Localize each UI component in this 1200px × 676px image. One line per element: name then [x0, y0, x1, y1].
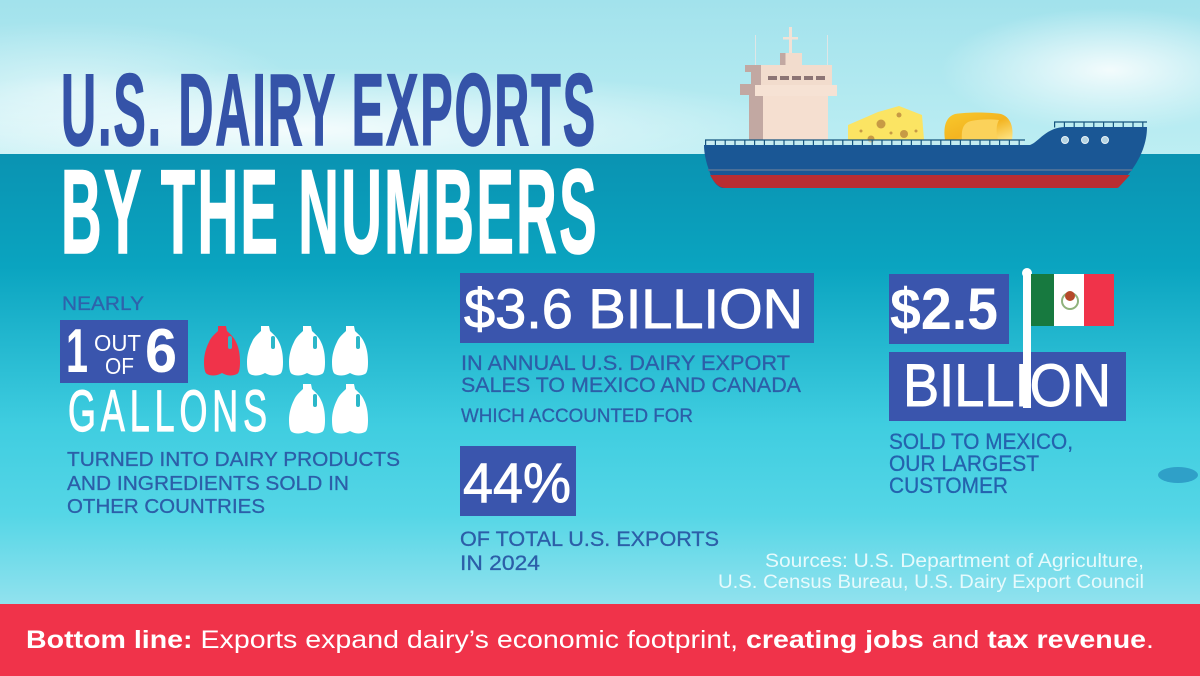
description: SOLD TO MEXICO, [889, 429, 1073, 454]
description: TURNED INTO DAIRY PRODUCTS [67, 448, 400, 471]
callout: 1 out of 6: 6 [145, 317, 177, 386]
sky background [0, 0, 1200, 192]
sources: Sources: U.S. Department of Agriculture, [765, 551, 1144, 572]
description: WHICH ACCOUNTED FOR [461, 405, 693, 427]
icon: cheese wedge [848, 106, 924, 142]
description: OTHER COUNTRIES [67, 495, 265, 518]
icon: milk jugs row two [289, 384, 368, 434]
bottom line banner: Bottom line: Exports expand dairy’s economic footprint, creating jobs and tax revenue . [26, 626, 1154, 654]
description: IN 2024 [460, 552, 540, 575]
title [61, 53, 599, 279]
description: SALES TO MEXICO AND CANADA [461, 374, 801, 397]
description [889, 429, 1073, 498]
ship railings [705, 122, 1147, 142]
description [460, 528, 719, 575]
description [67, 448, 400, 518]
callout: 1 out of 6 [60, 317, 188, 386]
panel: Mexico 2.5 billion [889, 268, 1126, 498]
callout: 44%: 44% [463, 451, 571, 514]
description: IN ANNUAL U.S. DAIRY EXPORT [461, 352, 790, 375]
callout: $3.6 billion: $3.6 BILLION [464, 277, 803, 340]
description: AND INGREDIENTS SOLD IN [67, 472, 349, 495]
callout: $2.5: $2.5 [890, 277, 998, 342]
ship superstructure [740, 27, 837, 140]
description [461, 352, 801, 427]
icon: butter block [944, 112, 1013, 140]
icon: cargo ship with cheese and butter [704, 27, 1147, 188]
callout: 1 out of 6: 1 [66, 317, 88, 386]
description: OF TOTAL U.S. EXPORTS [460, 528, 719, 551]
label: nearly: NEARLY [62, 294, 144, 315]
sea background [0, 154, 1200, 605]
icon: milk jugs row one [204, 326, 368, 376]
text: BY THE NUMBERS [61, 145, 599, 279]
text: U.S. DAIRY EXPORTS [61, 53, 597, 167]
sources: U.S. Census Bureau, U.S. Dairy Export Council [718, 572, 1144, 593]
description: OUR LARGEST [889, 451, 1039, 476]
callout: billion: BILLION [903, 352, 1111, 419]
callout: 1 out of 6: OF [105, 353, 134, 379]
panel: 3.6 billion sales [460, 273, 814, 575]
icon: Mexican flag [1022, 268, 1114, 408]
gallons label: GALLONS [68, 379, 272, 444]
bottom line banner [0, 604, 1200, 676]
callout: 1 out of 6: OUT [94, 330, 141, 356]
panel: 1 out of 6 gallons [60, 294, 400, 518]
description: CUSTOMER [889, 473, 1008, 498]
ship hull [704, 127, 1147, 188]
sources [718, 551, 1144, 593]
decorative ripple [1158, 467, 1198, 483]
